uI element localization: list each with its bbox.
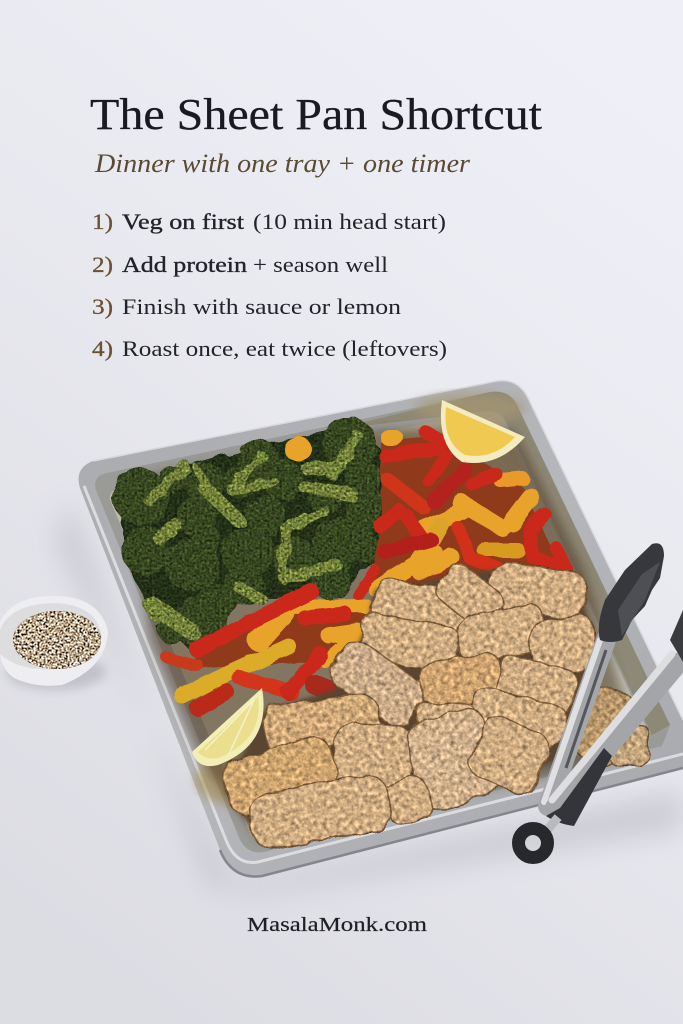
loop handle <box>518 828 548 858</box>
broccoli <box>113 418 388 650</box>
lemon wedge: top <box>441 400 525 463</box>
pan floor <box>110 412 650 842</box>
step 2: Add protein <box>122 252 247 277</box>
chicken pieces <box>218 560 650 852</box>
kitchen tongs <box>518 543 683 858</box>
floret stems <box>150 438 358 632</box>
lemon wedge: bottom <box>192 688 264 766</box>
front arm <box>556 664 676 808</box>
broccoli backing <box>118 425 384 650</box>
website credit: MasalaMonk.com <box>247 914 428 936</box>
tray shadow <box>55 500 683 895</box>
step 2: + season well <box>253 252 388 277</box>
step 1: (10 min head start) <box>253 209 446 234</box>
sheet pan <box>79 381 683 876</box>
pan inner wall <box>95 392 670 852</box>
rear tong head <box>599 543 664 642</box>
food shadow <box>125 430 640 840</box>
chicken backing <box>225 570 595 840</box>
red strips <box>167 432 566 708</box>
step 3: Finish with sauce or lemon <box>122 294 401 319</box>
floret heads <box>113 418 388 648</box>
tongs pivot <box>539 814 562 838</box>
pepper under layer <box>190 440 555 665</box>
orange and yellow strips <box>182 438 530 696</box>
step 1: Veg on first <box>122 209 244 234</box>
step 1: 1) <box>92 209 113 234</box>
step 4: Roast once, eat twice (leftovers) <box>122 336 447 361</box>
pan rim <box>79 381 683 876</box>
step 4: 4) <box>92 336 113 361</box>
black grip <box>546 748 612 826</box>
rear arm <box>548 640 606 806</box>
step 1 <box>92 209 446 234</box>
step 3: 3) <box>92 294 113 319</box>
step 2 <box>92 252 388 277</box>
step 2: 2) <box>92 252 113 277</box>
bell peppers <box>167 432 566 708</box>
title: The Sheet Pan Shortcut <box>90 90 542 139</box>
icon: seasoning bowl <box>0 596 108 690</box>
steps list <box>92 209 447 361</box>
front tong head <box>670 610 683 662</box>
subtitle: Dinner with one tray + one timer <box>94 149 471 178</box>
